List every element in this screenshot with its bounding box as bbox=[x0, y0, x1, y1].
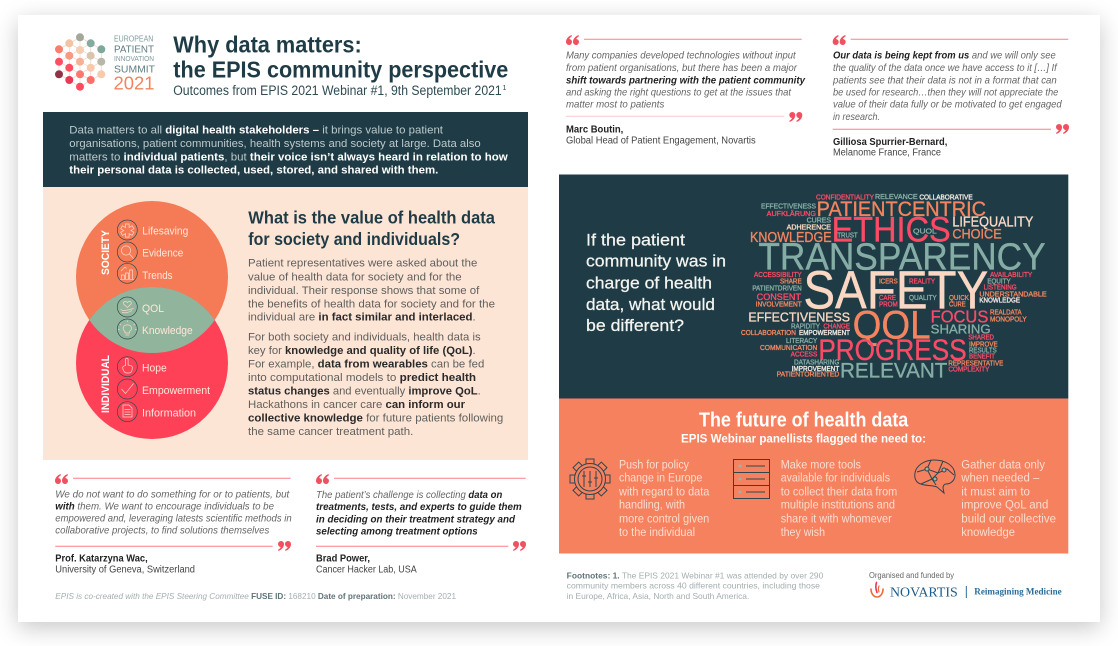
word cloud: AVAILABILITY bbox=[990, 272, 1033, 279]
text: gather data: when needed – bbox=[960, 471, 1039, 485]
text: policy change: with regard to data bbox=[618, 484, 709, 498]
icon: gear with sliders bbox=[570, 459, 610, 499]
panel: value of health data bbox=[43, 187, 528, 460]
item: QOL: QOL bbox=[142, 303, 164, 315]
quote: Marc Boutin: and asking the right questions to get at the issues that bbox=[566, 88, 792, 99]
word cloud: KNOWLEDGE bbox=[750, 230, 832, 246]
quote: Katarzyna Wac: University of Geneva, Switzerland bbox=[55, 564, 195, 575]
quote: Marc Boutin: from patient organisations, but there has been a major bbox=[566, 63, 798, 74]
text: policy change: more control given bbox=[619, 511, 709, 525]
text: policy change: to the individual bbox=[619, 525, 695, 539]
question text: charge of health bbox=[586, 273, 712, 292]
quote: Marc Boutin: Many companies developed technologies without input bbox=[566, 51, 797, 62]
quote: Brad Power: Cancer Hacker Lab, USA bbox=[316, 564, 417, 575]
quote: Katarzyna Wac: empowered and, leveraging latests scientific methods in bbox=[55, 513, 292, 524]
text: policy change: change in Europe bbox=[619, 471, 702, 485]
panel: introduction bbox=[43, 112, 528, 187]
quote: Gilliosa Spurrier-Bernard: patients see that their data is not in a format that can bbox=[832, 75, 1057, 86]
word cloud: EFFECTIVENESS bbox=[748, 310, 850, 325]
word cloud: IMPROVE bbox=[969, 342, 998, 349]
item: evidence: Evidence bbox=[142, 248, 183, 260]
text block: knowledge and quality of life bbox=[248, 332, 503, 438]
icon: closing quote bbox=[789, 112, 802, 122]
word cloud: EMPOWERMENT bbox=[799, 330, 851, 337]
footer: preparation details: EPIS is co-created with the EPIS Steering Committee FUSE ID: 168210 Date of preparation: November 2021 bbox=[55, 591, 456, 601]
quote: Gilliosa Spurrier-Bernard: value of their data fully or be motivated to get engaged bbox=[833, 100, 1062, 111]
text block: survey response: value of health data for society and for the bbox=[248, 271, 462, 283]
quote: Gilliosa Spurrier-Bernard bbox=[832, 35, 1069, 159]
text block: knowledge and quality of life: status changes and eventually improve QoL. bbox=[248, 386, 481, 398]
text block: knowledge and quality of life: For both society and individuals, health data is bbox=[248, 332, 481, 344]
text: gather data: it must aim to bbox=[961, 484, 1030, 498]
title: the EPIS community perspective bbox=[173, 56, 508, 82]
quote: Katarzyna Wac: Prof. Katarzyna Wac, bbox=[55, 554, 148, 565]
text: gather data: improve QoL and bbox=[961, 498, 1048, 512]
text: more tools: to collect their data from bbox=[781, 484, 897, 498]
logo: European Patient Innovation Summit 2021: SUMMIT bbox=[114, 63, 156, 75]
word cloud: REPRESENTATIVE bbox=[948, 361, 1004, 368]
logo: European Patient Innovation Summit 2021: EUROPEAN bbox=[114, 35, 153, 44]
word cloud: QUALITY bbox=[909, 295, 937, 302]
word cloud: LISTENING bbox=[984, 285, 1017, 292]
word cloud: QUICK bbox=[949, 295, 969, 302]
quote: Marc Boutin: matter most to patients bbox=[566, 100, 664, 111]
word cloud: PATIENTCENTRIC bbox=[817, 197, 986, 221]
text: more tools: multiple institutions and bbox=[781, 498, 895, 512]
word cloud: EQUITY bbox=[987, 279, 1011, 286]
logo: European Patient Innovation Summit 2021: INNOVATION bbox=[114, 56, 154, 63]
word cloud: SHARE bbox=[780, 279, 802, 286]
item: knowledge bbox=[117, 319, 193, 339]
footnotes bbox=[567, 570, 824, 601]
text: more tools: Make more tools bbox=[781, 457, 861, 471]
word cloud: PROGRESS bbox=[818, 334, 967, 367]
question text: community was in bbox=[586, 252, 726, 271]
icon: hexagonal dot network bbox=[55, 33, 105, 91]
item: knowledge: Knowledge bbox=[142, 325, 193, 337]
word cloud: CONSENT bbox=[757, 292, 801, 302]
footnotes: Footnotes: 1. The EPIS 2021 Webinar #1 was attended by over 290 bbox=[567, 570, 824, 580]
title: Why data matters: bbox=[173, 32, 362, 58]
label: society: SOCIETY bbox=[100, 229, 112, 275]
logo: European Patient Innovation Summit 2021: PATIENT bbox=[114, 43, 155, 55]
word cloud: EFFECTIVENESS bbox=[761, 204, 816, 211]
word cloud: FOCUS bbox=[931, 307, 988, 327]
logo: European Patient Innovation Summit 2021: 2021 bbox=[114, 73, 154, 93]
heading: EPIS Webinar panellists flagged the need to: bbox=[681, 431, 926, 445]
text block: survey response: individual. Their response shows that some of bbox=[248, 285, 480, 297]
footnotes: community members across 40 different countries, including those bbox=[567, 581, 820, 591]
word cloud: SHARING bbox=[931, 321, 991, 336]
icon: server stack bbox=[734, 460, 770, 498]
quote: Marc Boutin: Global Head of Patient Engagement, Novartis bbox=[566, 135, 756, 146]
word cloud: BENEFIT bbox=[969, 354, 996, 361]
word cloud: ICERS bbox=[879, 279, 898, 286]
item: hope: Hope bbox=[142, 363, 167, 375]
text block: knowledge and quality of life: collective knowledge for future patients following bbox=[248, 413, 503, 425]
text: gather data: build our collective bbox=[961, 511, 1056, 525]
sponsor: Novartis: Reimagining Medicine bbox=[974, 587, 1062, 597]
text block: knowledge and quality of life: the same cancer treatment path. bbox=[248, 426, 413, 438]
text block: knowledge and quality of life: into computational models to predict health bbox=[248, 372, 476, 384]
word cloud: RAPIDITY bbox=[791, 323, 820, 330]
text: policy change bbox=[618, 457, 709, 539]
text: gather data: knowledge bbox=[961, 525, 1015, 539]
word cloud: COMMUNICATION bbox=[760, 345, 817, 352]
text: more tools: they wish bbox=[781, 525, 825, 539]
icon: opening quote bbox=[55, 474, 68, 484]
quote: Brad Power bbox=[316, 474, 526, 575]
word cloud: COLLABORATION bbox=[741, 330, 796, 337]
item: information: Information bbox=[142, 408, 196, 420]
word cloud: TRUST bbox=[837, 232, 858, 239]
word cloud: KNOWLEDGE bbox=[979, 298, 1020, 305]
logo: European Patient Innovation Summit 2021 bbox=[55, 33, 156, 93]
word cloud: REALDATA bbox=[990, 309, 1022, 316]
quote: Katarzyna Wac: We do not want to do something for or to patients, but bbox=[55, 489, 290, 500]
word cloud: QUOL bbox=[913, 229, 937, 236]
word cloud: INVOLVEMENT bbox=[756, 302, 802, 309]
heading bbox=[248, 207, 495, 249]
heading: The future of health data bbox=[699, 409, 909, 432]
item: hope bbox=[117, 357, 167, 377]
title: Outcomes from EPIS 2021 Webinar #1, 9th September 2021 bbox=[173, 83, 502, 98]
word cloud: SHARED bbox=[968, 335, 994, 342]
word cloud: TRANSPARENCY bbox=[758, 235, 1046, 277]
question text: If the patient bbox=[586, 231, 685, 250]
word cloud: CONFIDENTIALITY bbox=[816, 194, 874, 201]
word cloud: CARE bbox=[879, 295, 896, 302]
question text: be different? bbox=[586, 316, 684, 335]
icon: closing quote bbox=[278, 541, 291, 551]
text: more tools: available for individuals bbox=[781, 471, 890, 485]
word cloud: DATASHARING bbox=[794, 360, 839, 367]
word cloud: PATIENTORIENTED bbox=[777, 372, 839, 379]
panel: introduction: Data matters to all digital health stakeholders – it brings value to patient bbox=[69, 124, 444, 136]
question text: data, what would bbox=[586, 295, 715, 314]
item: empowerment: Empowerment bbox=[142, 385, 210, 397]
word cloud: PATIENTDRIVEN bbox=[752, 286, 802, 293]
word cloud: UNDERSTANDABLE bbox=[979, 290, 1047, 299]
word cloud: SAFETY bbox=[803, 261, 988, 320]
title bbox=[173, 32, 508, 98]
text block: knowledge and quality of life: Hackathons in cancer care can inform our bbox=[248, 399, 466, 411]
quote: Gilliosa Spurrier-Bernard: the quality of the data once we have access to it […] If bbox=[833, 63, 1058, 74]
word cloud: CHANGE bbox=[823, 323, 850, 330]
heading: for society and individuals? bbox=[248, 229, 460, 249]
venn diagram bbox=[76, 201, 228, 439]
word cloud: QOL bbox=[853, 303, 931, 347]
item: trends bbox=[117, 263, 173, 283]
word cloud: LITERACY bbox=[786, 338, 818, 345]
label: individual: INDIVIDUAL bbox=[100, 355, 112, 413]
quote: Brad Power: in deciding on their treatment strategy and bbox=[316, 514, 516, 525]
item: empowerment bbox=[117, 379, 210, 399]
sponsor: Novartis: Organised and funded by bbox=[869, 571, 954, 580]
overlap bbox=[89, 287, 215, 353]
icon: brain network bbox=[915, 460, 955, 493]
word cloud: CHOICE bbox=[952, 225, 1002, 241]
question text bbox=[586, 231, 726, 335]
quote: Brad Power: treatments, tests, and experts to guide them bbox=[316, 502, 522, 513]
quote: Gilliosa Spurrier-Bernard: Our data is being kept from us and we will only see bbox=[833, 51, 1056, 62]
text block: knowledge and quality of life: For example, data from wearables can be fed bbox=[248, 359, 484, 371]
text block: survey response: the benefits of health data for society and for the bbox=[248, 298, 495, 310]
icon: opening quote bbox=[566, 35, 579, 45]
text: more tools bbox=[781, 457, 897, 539]
word cloud bbox=[741, 194, 1047, 382]
quote: Marc Boutin: Marc Boutin, bbox=[566, 125, 624, 136]
text: gather data: Gather data only bbox=[961, 457, 1046, 471]
sponsor: Novartis: NOVARTIS bbox=[890, 585, 958, 600]
quote: Marc Boutin bbox=[566, 35, 806, 146]
word cloud: RESULTS bbox=[969, 348, 997, 355]
text: more tools: share it with whomever bbox=[781, 511, 892, 525]
text: policy change: handling, with bbox=[619, 498, 685, 512]
panel: patient community word cloud bbox=[559, 174, 1068, 398]
footnotes: in Europe, Africa, Asia, North and South America. bbox=[567, 591, 749, 601]
icon: closing quote bbox=[1056, 124, 1069, 134]
word cloud: ADHERENCE bbox=[787, 225, 831, 232]
quote: Katarzyna Wac: with them. We want to encourage individuals to be bbox=[55, 501, 274, 512]
icon: opening quote bbox=[833, 35, 846, 45]
heading bbox=[681, 409, 926, 445]
item: QOL bbox=[117, 297, 164, 317]
quote: Gilliosa Spurrier-Bernard: Melanome France, France bbox=[833, 148, 941, 159]
word cloud: ACCESS bbox=[791, 352, 818, 359]
title: 1 bbox=[502, 85, 506, 92]
quote: Katarzyna Wac: collaborative projects, to find solutions themselves bbox=[55, 526, 269, 537]
word cloud: IMPROVEMENT bbox=[792, 366, 840, 373]
quote: Marc Boutin: shift towards partnering with the patient community bbox=[566, 75, 806, 86]
heading: What is the value of health data bbox=[248, 207, 495, 227]
word cloud: RELEVANT bbox=[840, 357, 947, 382]
word cloud: COLLABORATIVE bbox=[919, 194, 973, 201]
icon: opening quote bbox=[316, 474, 329, 484]
word cloud: PROM bbox=[879, 302, 898, 309]
icon: closing quote bbox=[513, 541, 526, 551]
word cloud: ETHICS bbox=[832, 211, 951, 250]
word cloud: CURE bbox=[949, 302, 966, 309]
icon: Novartis flame bbox=[871, 582, 883, 597]
word cloud: MONOPOLY bbox=[990, 317, 1027, 324]
quote: Gilliosa Spurrier-Bernard: be used for research…then they will not appreciate the bbox=[833, 88, 1059, 99]
quote: Gilliosa Spurrier-Bernard: in research. bbox=[833, 112, 880, 123]
quote: Gilliosa Spurrier-Bernard: Gilliosa Spurrier-Bernard, bbox=[833, 137, 947, 148]
word cloud: COMPLEXITY bbox=[948, 367, 990, 374]
word cloud: RELEVANCE bbox=[875, 194, 918, 201]
text: gather data bbox=[960, 457, 1056, 539]
quote: Katarzyna Wac bbox=[55, 474, 292, 575]
panel: introduction: their personal data is collected, used, stored, and shared with them. bbox=[69, 165, 438, 177]
text block: survey response bbox=[248, 258, 495, 324]
text block: knowledge and quality of life: key for knowledge and quality of life (QoL). bbox=[248, 345, 476, 357]
quote: Brad Power: selecting among treatment options bbox=[316, 527, 478, 538]
item: lifesaving bbox=[117, 220, 188, 240]
text: policy change: Push for policy bbox=[619, 457, 690, 471]
item: information bbox=[117, 402, 196, 422]
word cloud: LIFEQUALITY bbox=[952, 214, 1033, 231]
word cloud: AUFKLÄRUNG bbox=[767, 210, 816, 218]
word cloud: ACCESSIBILITY bbox=[754, 272, 802, 279]
sponsor: Novartis bbox=[869, 571, 1062, 600]
quote: Brad Power: The patient’s challenge is collecting data on bbox=[316, 490, 502, 501]
text block: survey response: individual are in fact similar and interlaced. bbox=[248, 312, 476, 324]
panel: introduction: matters to individual patients, but their voice isn’t always heard in relation to how bbox=[69, 151, 508, 163]
text block: survey response: Patient representatives were asked about the bbox=[248, 258, 477, 270]
word cloud: REALITY bbox=[909, 279, 935, 286]
panel: the future of health data bbox=[559, 398, 1068, 554]
panel: introduction: organisations, patient communities, health systems and society at large. Data also bbox=[69, 138, 481, 150]
item: evidence bbox=[117, 242, 183, 262]
item: lifesaving: Lifesaving bbox=[142, 225, 188, 237]
item: trends: Trends bbox=[142, 270, 173, 282]
quote: Brad Power: Brad Power, bbox=[316, 554, 370, 565]
word cloud: CURES bbox=[807, 218, 831, 225]
